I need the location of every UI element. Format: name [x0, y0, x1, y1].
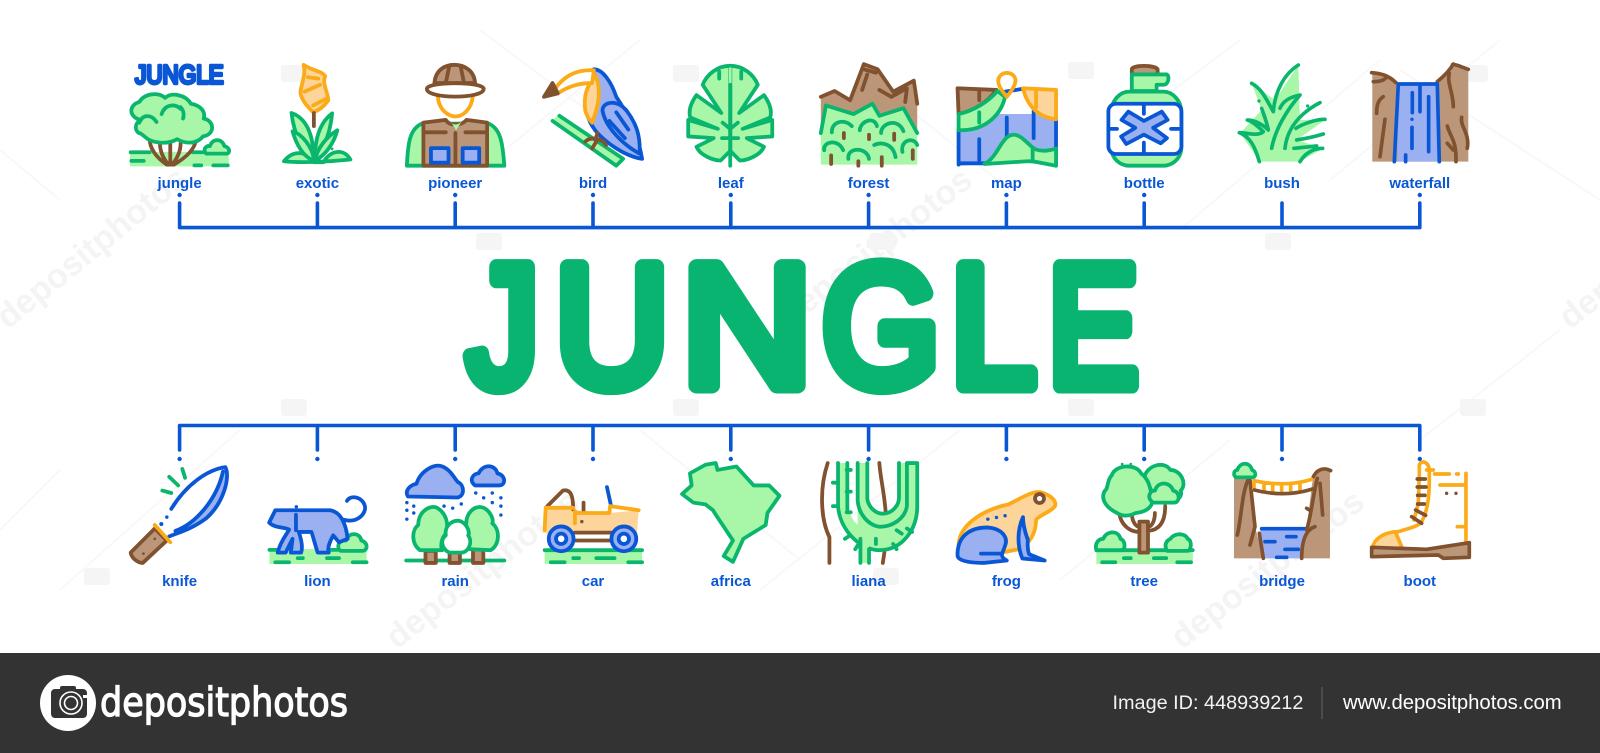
- label: bush: bush: [1264, 175, 1300, 192]
- logo wordmark: depositphotos: [100, 680, 348, 726]
- label: tree: tree: [1130, 573, 1158, 590]
- icon: toucan bird: [544, 69, 642, 166]
- title: JUNGLE: L: [950, 230, 1036, 422]
- title: JUNGLE: G: [822, 230, 940, 422]
- label: rain: rain: [441, 573, 469, 590]
- bottom row icons, right group: [1234, 462, 1469, 558]
- label: exotic: exotic: [296, 175, 339, 192]
- label: jungle: jungle: [157, 175, 202, 192]
- icon: safari jeep: [545, 487, 642, 564]
- label: boot: boot: [1404, 573, 1436, 590]
- icon: grass bush: [1239, 65, 1325, 162]
- label: car: car: [582, 573, 604, 590]
- top connector bracket: [177, 193, 1422, 228]
- label: bridge: bridge: [1259, 573, 1305, 590]
- icon: exotic plant: [284, 65, 350, 162]
- label: bird: bird: [579, 175, 607, 192]
- icon: frog: [958, 492, 1055, 563]
- title: JUNGLE: N: [682, 230, 812, 422]
- icon: jungle tree with wordmark: [130, 62, 229, 166]
- icon: rain over trees: [405, 466, 504, 563]
- title: JUNGLE: E: [1048, 230, 1139, 422]
- label: frog: frog: [992, 573, 1021, 590]
- website url: www.depositphotos.com: [1342, 692, 1562, 714]
- icon: panther: [269, 497, 367, 564]
- label: liana: liana: [852, 573, 886, 590]
- icon: waterfall: [1372, 64, 1468, 162]
- label: knife: knife: [162, 573, 197, 590]
- icon: liana vines: [822, 463, 917, 563]
- label: pioneer: pioneer: [428, 175, 482, 192]
- label: lion: lion: [304, 573, 331, 590]
- icon: monstera leaf: [688, 66, 772, 166]
- footer bar: [0, 653, 1600, 753]
- background watermark: depositphotos: [1164, 482, 1371, 656]
- bottom row icons, left group: [131, 466, 642, 564]
- icon: rope bridge: [1234, 464, 1331, 558]
- label: map: map: [991, 175, 1022, 192]
- icon: mountain forest: [821, 64, 917, 166]
- background watermark: depositphotos: [772, 160, 979, 334]
- label: leaf: leaf: [718, 175, 745, 192]
- label: waterfall: waterfall: [1388, 175, 1450, 192]
- bottom connector bracket: [177, 426, 1422, 461]
- icon: camera logo: [40, 675, 96, 731]
- title: JUNGLE: [467, 230, 1139, 422]
- label: africa: africa: [711, 573, 751, 590]
- title: JUNGLE: J: [467, 230, 539, 422]
- bottom row icons, middle group: [682, 463, 1193, 564]
- background watermark: depositphotos: [379, 482, 586, 656]
- label: forest: forest: [848, 175, 889, 192]
- icon: pioneer explorer: [407, 65, 504, 166]
- top row icons, left group: [130, 62, 642, 166]
- icon: folded map: [958, 73, 1056, 166]
- top row icons, right group: [1239, 64, 1468, 162]
- icon: machete knife: [131, 467, 227, 563]
- image id: Image ID: 448939212: [1112, 692, 1303, 714]
- title: JUNGLE: U: [555, 230, 669, 422]
- icon: jungle tree with wordmark: JUNGLE: [135, 62, 224, 90]
- icon: hiking boot: [1372, 462, 1469, 558]
- top row icons, middle group: [688, 64, 1181, 166]
- label: bottle: bottle: [1124, 175, 1165, 192]
- icon: tree with bushes: [1096, 463, 1193, 564]
- icon: canteen bottle: [1108, 66, 1181, 166]
- icon: continent map: [682, 463, 779, 562]
